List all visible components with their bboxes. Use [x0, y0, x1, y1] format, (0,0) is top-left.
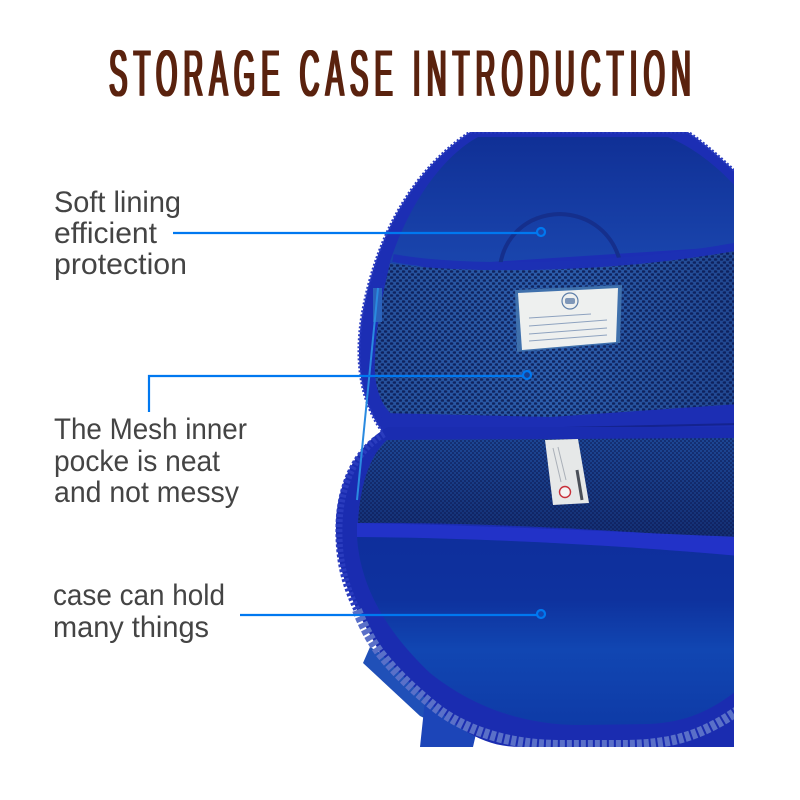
- callout: mesh pocket: [54, 371, 531, 509]
- upper zipper edge: [359, 132, 740, 434]
- lower zipper upper part: [339, 434, 384, 610]
- pocket top binding: [393, 246, 740, 266]
- embossed circle: [500, 214, 619, 266]
- shoulder strap pad: [363, 647, 429, 718]
- callout: holds many things: many things: [53, 611, 209, 644]
- lower pocket binding: [357, 523, 740, 556]
- title: STORAGE CASE INTRODUCTION: [108, 36, 696, 110]
- upper lid shell: [359, 132, 740, 434]
- webbing strap: [420, 700, 478, 747]
- callout: mesh pocket: pocke is neat: [54, 445, 221, 478]
- callout: mesh pocket: and not messy: [54, 476, 239, 509]
- callout: mesh pocket: The Mesh inner: [54, 413, 247, 446]
- lower zipper teeth: [357, 610, 740, 745]
- washing tag: [545, 439, 589, 505]
- callout: soft lining: [54, 186, 545, 281]
- upper soft lining: [390, 137, 740, 268]
- name card: [515, 285, 622, 352]
- middle seam: [390, 404, 734, 417]
- callout: soft lining: protection: [54, 248, 187, 281]
- lower mesh pocket: [358, 438, 740, 540]
- lower shell: [336, 427, 740, 747]
- lower soft lining: [357, 537, 734, 725]
- infographic canvas: [54, 132, 734, 747]
- callout: holds many things: case can hold: [53, 579, 225, 612]
- upper mesh pocket: [375, 250, 740, 417]
- blue connector seam line: [357, 288, 382, 500]
- callout: holds many things: [53, 579, 545, 644]
- callout: soft lining: efficient: [54, 217, 158, 250]
- callout: soft lining: Soft lining: [54, 186, 181, 219]
- photo: open storage case: [336, 132, 740, 747]
